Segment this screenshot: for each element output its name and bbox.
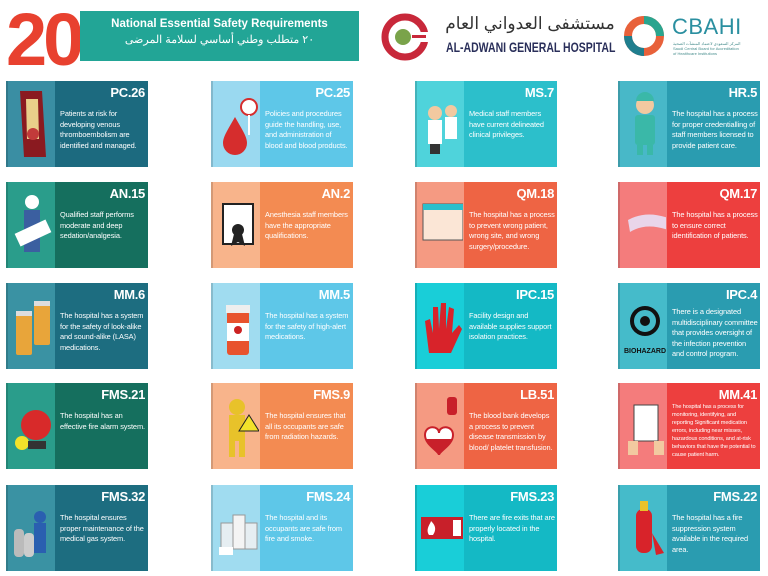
card FMS.24: The hospital and its occupants are safe from fire and smoke.: [265, 513, 342, 543]
card QM.18: QM.18: [516, 186, 554, 201]
hospital logo: مستشفى العدواني العام: [445, 14, 615, 33]
card AN.2: AN.2: [322, 186, 350, 201]
card IPC.4: [618, 283, 760, 369]
card MS.7: [415, 81, 557, 167]
card FMS.22: The hospital has a fire suppression system available in the required area.: [672, 513, 748, 554]
CBAHI logo: المركز السعودي لاعتماد المنشآت الصحية: [673, 41, 741, 46]
card IPC.15: [415, 283, 557, 369]
card LB.51: LB.51: [520, 387, 554, 402]
card AN.2: Anesthesia staff members have the appropriate qualifications.: [265, 210, 348, 240]
card HR.5: The hospital has a process for proper credentialling of staff members licensed to provide patient care.: [672, 109, 758, 150]
card MM.41: MM.41: [719, 387, 757, 402]
card PC.25: PC.25: [315, 85, 350, 100]
card LB.51: [415, 383, 557, 469]
CBAHI logo: [624, 14, 742, 56]
card FMS.21: FMS.21: [101, 387, 145, 402]
CBAHI logo: of Healthcare Institutions: [673, 51, 717, 56]
card MM.5: The hospital has a system for the safety of high-alert medications.: [265, 311, 348, 341]
card IPC.15: Facility design and available supplies support isolation practices.: [469, 311, 551, 341]
card FMS.24: FMS.24: [306, 489, 350, 504]
card MS.7: Medical staff members have current delineated clinical privileges.: [469, 109, 544, 139]
header: big number 20: 20: [6, 0, 80, 81]
card QM.17: [618, 182, 760, 268]
card IPC.4: There is a designated multidisciplinary committee that provides oversight of the infection prevention and control program.: [672, 307, 758, 358]
card MM.6: The hospital has a system for the safety of look-alike and sound-alike (LASA) medications.: [60, 311, 143, 352]
card PC.26: [6, 81, 148, 167]
card FMS.32: The hospital ensures proper maintenance of the medical gas system.: [60, 513, 144, 543]
card FMS.21: The hospital has an effective fire alarm system.: [60, 411, 145, 430]
header banner: [80, 11, 359, 61]
card PC.26: PC.26: [110, 85, 145, 100]
card QM.17: QM.17: [719, 186, 757, 201]
card HR.5: HR.5: [729, 85, 757, 100]
card LB.51: The blood bank develops a process to prevent disease transmission by blood/ platelet transfusion.: [469, 411, 552, 452]
card FMS.24: [211, 485, 353, 571]
card FMS.22: FMS.22: [713, 489, 757, 504]
card HR.5: [618, 81, 760, 167]
hospital logo: AL-ADWANI GENERAL HOSPITAL: [446, 39, 615, 55]
card AN.2: [211, 182, 353, 268]
card QM.18: [415, 182, 557, 268]
hospital logo: [382, 14, 616, 60]
card FMS.9: FMS.9: [313, 387, 350, 402]
card MM.41: The hospital has a process for monitoring, identifying, and reporting Significant medication errors, including near misses, hazardous conditions, and at-risk behaviors that have the potential to cause patient harm.: [672, 404, 755, 458]
card AN.15: [6, 182, 148, 268]
card MM.5: [211, 283, 353, 369]
card MM.6: [6, 283, 148, 369]
card PC.26: Patients at risk for developing venous thromboembolism are identified and managed.: [60, 109, 137, 150]
card AN.15: Qualified staff performs moderate and deep sedation/analgesia.: [60, 210, 134, 240]
card FMS.32: [6, 485, 148, 571]
card PC.25: Policies and procedures guide the handling, use, and administration of blood and blood products.: [265, 109, 348, 150]
card MS.7: MS.7: [525, 85, 554, 100]
card IPC.15: IPC.15: [516, 287, 554, 302]
card FMS.23: [415, 485, 557, 571]
card MM.41: [618, 383, 760, 469]
card FMS.9: [211, 383, 353, 469]
card FMS.23: FMS.23: [510, 489, 554, 504]
card MM.6: MM.6: [114, 287, 145, 302]
header banner: National Essential Safety Requirements: [111, 18, 328, 30]
card QM.18: The hospital has a process to prevent wrong patient, wrong site, and wrong surgery/procedure.: [469, 210, 555, 250]
CBAHI logo: CBAHI: [672, 14, 742, 39]
card FMS.9: The hospital ensures that all its occupants are safe from radiation hazards.: [265, 411, 346, 441]
CBAHI logo: Saudi Central Board for Accreditation: [673, 46, 739, 51]
card FMS.22: [618, 485, 760, 571]
card IPC.4: BIOHAZARD: [624, 348, 666, 355]
header banner: ٢٠ متطلب وطني أساسي لسلامة المرضى: [125, 34, 314, 46]
card FMS.23: There are fire exits that are properly located in the hospital.: [469, 513, 555, 543]
card QM.17: The hospital has a process to ensure correct identification of patients.: [672, 210, 758, 240]
card FMS.32: FMS.32: [101, 489, 145, 504]
card MM.5: MM.5: [319, 287, 350, 302]
card IPC.4: IPC.4: [726, 287, 757, 302]
card PC.25: [211, 81, 353, 167]
card AN.15: AN.15: [110, 186, 145, 201]
card FMS.21: [6, 383, 148, 469]
